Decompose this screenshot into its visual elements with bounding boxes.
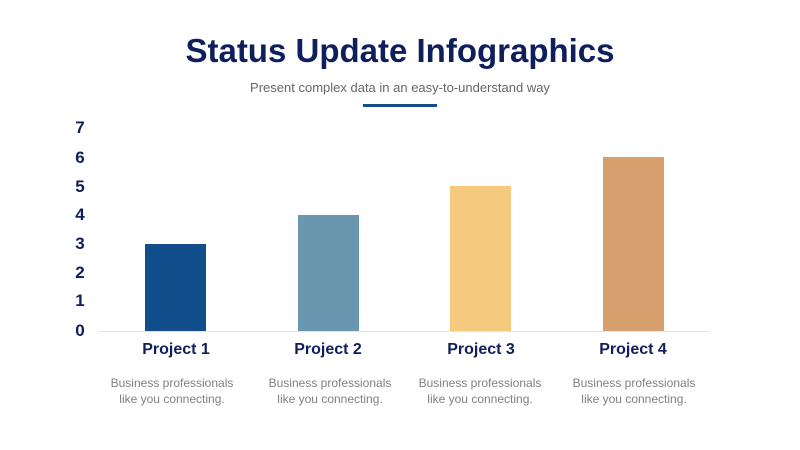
description 1: Business professionals [111,376,233,390]
label: project 1: Project 1 [142,341,210,358]
y axis labels: 3 [75,234,85,253]
description 1 [111,376,233,406]
description 3: like you connecting. [427,392,533,406]
description 2: like you connecting. [277,392,383,406]
bar: project 2 [298,215,359,331]
description 3: Business professionals [419,376,541,390]
y axis labels: 0 [75,321,85,340]
description 2 [269,376,391,406]
description 1: like you connecting. [119,392,225,406]
y axis labels: 7 [75,118,85,137]
y axis labels: 2 [75,263,85,282]
bar chart [145,157,664,331]
description 3 [419,376,541,406]
y axis labels: 5 [75,177,85,196]
title: Status Update Infographics [185,32,615,69]
label: project 3: Project 3 [447,341,515,358]
y axis labels: 1 [75,291,85,310]
label: project 4: Project 4 [599,341,667,358]
axis line [98,331,710,332]
bar: project 4 [603,157,664,331]
description 4 [573,376,695,406]
underline accent [363,104,437,107]
y axis labels: 6 [75,148,85,167]
bar: project 3 [450,186,511,331]
bar: project 1 [145,244,206,331]
label: project 2: Project 2 [294,341,362,358]
description 2: Business professionals [269,376,391,390]
description 4: like you connecting. [581,392,687,406]
y axis labels: 4 [75,205,85,224]
y axis labels [75,118,85,340]
subtitle: Present complex data in an easy-to-understand way [250,80,550,95]
description 4: Business professionals [573,376,695,390]
